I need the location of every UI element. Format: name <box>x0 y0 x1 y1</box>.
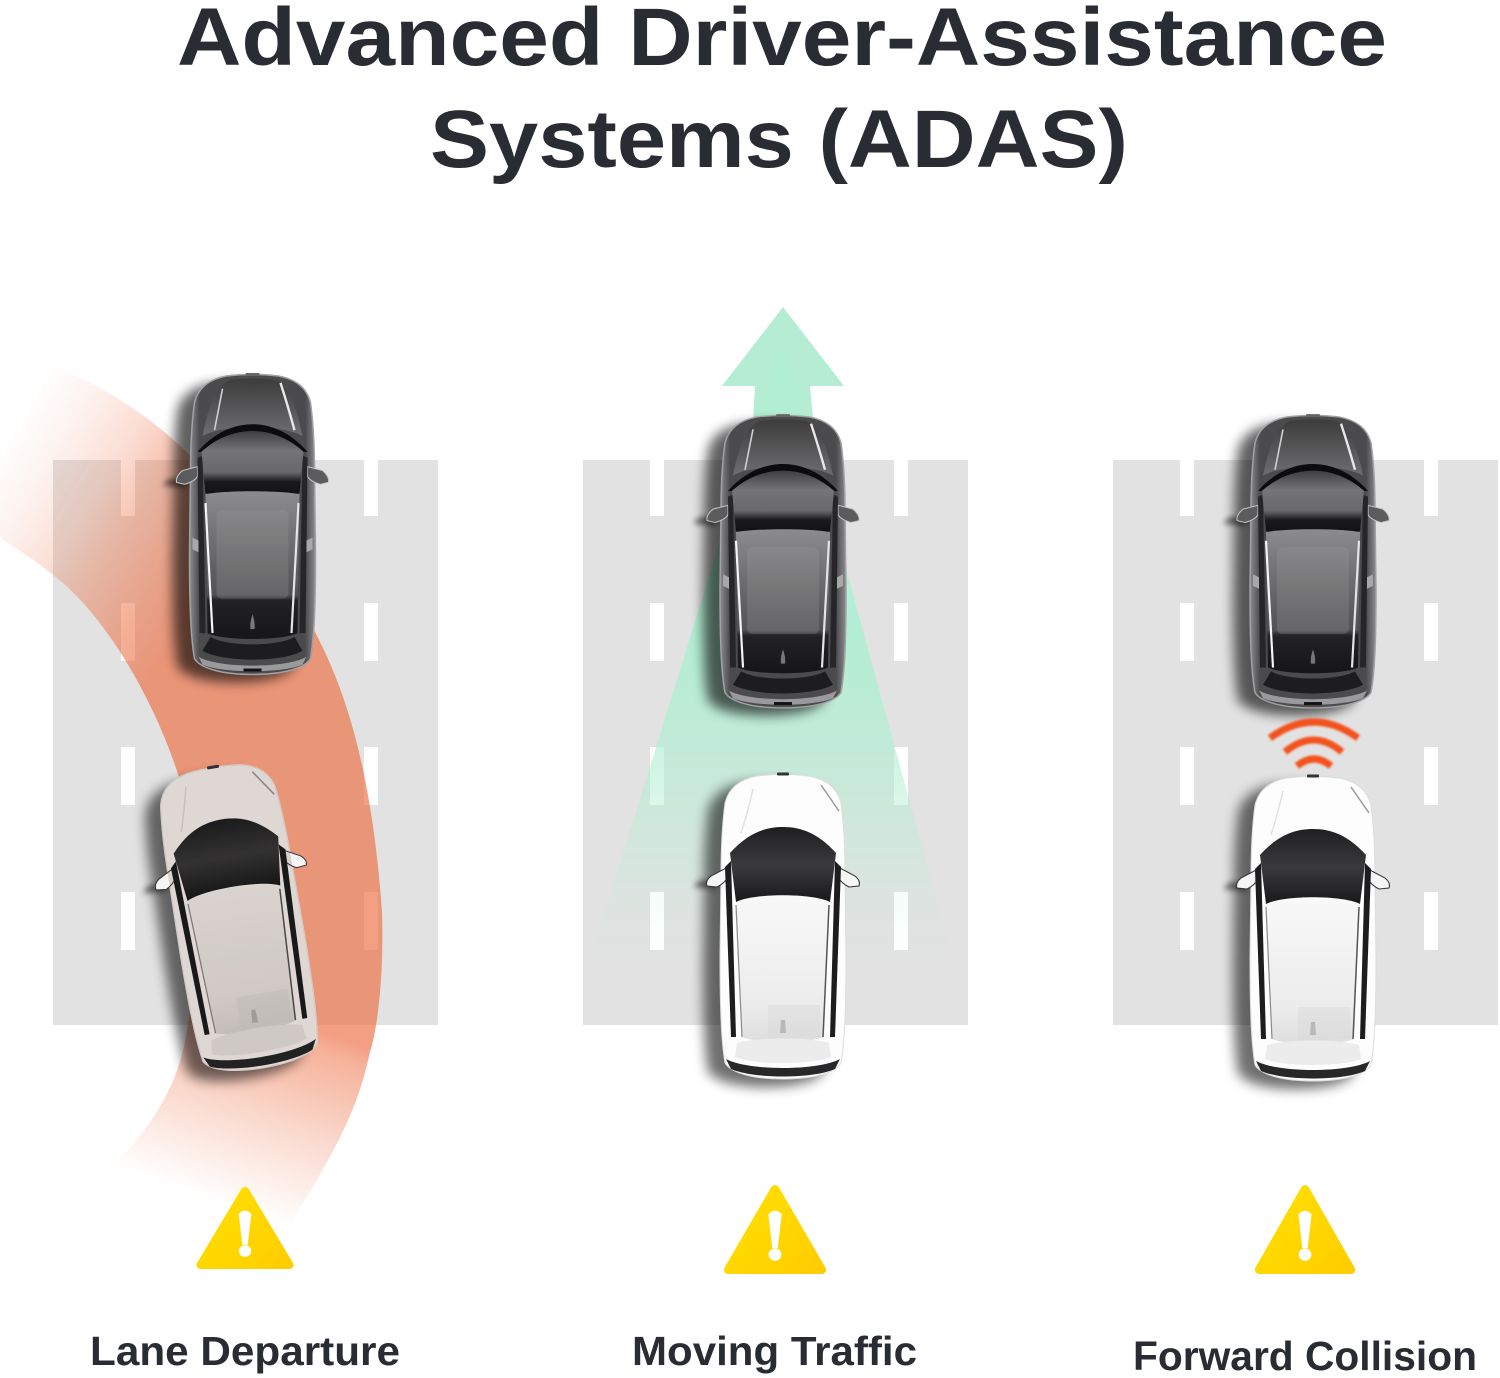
title <box>177 0 1387 185</box>
icon: warning triangle <box>201 1191 289 1265</box>
dark car ahead <box>162 373 329 682</box>
panel: forward collision <box>1113 414 1498 1378</box>
label: lane departure: Lane Departure <box>90 1328 400 1374</box>
icon: warning triangle <box>728 1189 822 1270</box>
curved orange departure path <box>0 345 382 1225</box>
panel: moving traffic <box>583 307 968 1374</box>
white car drifting <box>124 753 340 1091</box>
dark car ahead <box>1223 414 1389 716</box>
label: moving traffic: Moving Traffic <box>632 1328 917 1374</box>
road: moving traffic <box>583 460 968 1025</box>
icon: warning triangle <box>1259 1189 1351 1270</box>
label: forward collision: Forward Collision <box>1133 1333 1477 1378</box>
title: Systems (ADAS) <box>430 94 1128 185</box>
icon: collision signal waves <box>1270 722 1358 766</box>
dark car ahead <box>693 414 859 716</box>
green arrow and detection cone <box>590 307 953 960</box>
white car behind <box>693 772 860 1087</box>
road: lane departure <box>53 460 438 1025</box>
panel: lane departure <box>0 345 438 1374</box>
white car behind <box>1223 774 1390 1089</box>
road: forward collision <box>1113 460 1498 1025</box>
